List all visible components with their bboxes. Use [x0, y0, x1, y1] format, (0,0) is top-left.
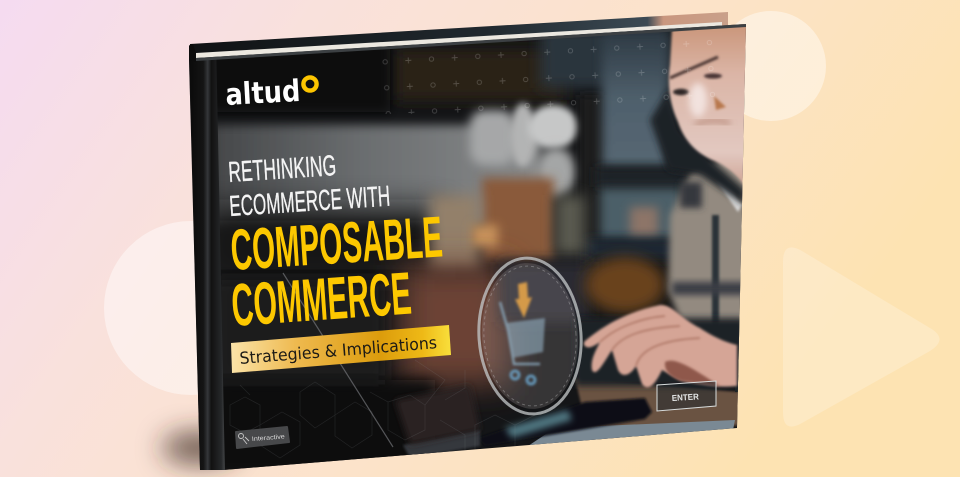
dark lower left [205, 380, 435, 475]
neck shadow [650, 90, 745, 205]
laptop keyboard [395, 385, 480, 445]
book shadow [162, 431, 238, 465]
cover photo [180, 10, 760, 477]
enter button: ENTER [672, 391, 699, 403]
face [669, 22, 750, 195]
heading: composable commerce: COMMERCE [229, 260, 413, 339]
decorative circle: left [104, 221, 278, 395]
bokeh highlights [470, 110, 515, 165]
enter button [657, 381, 716, 411]
subtitle ribbon: Strategies & Implications [239, 333, 438, 368]
heading: composable commerce [229, 204, 444, 339]
decorative play triangle [783, 247, 940, 427]
cover top edge [196, 24, 746, 61]
hologram ring [474, 255, 586, 417]
interactive badge [236, 427, 289, 448]
back cover corner [189, 44, 196, 62]
warm blur patches [482, 178, 554, 260]
dark column beside bokeh [572, 100, 598, 193]
logo: altudo: altud [224, 74, 301, 113]
heading: rethinking ecommerce with: RETHINKING [227, 150, 337, 189]
eyes and brow [670, 57, 730, 124]
grey blurred band [212, 125, 542, 225]
page block [196, 22, 722, 58]
phone [478, 398, 652, 446]
blue column [602, 32, 668, 167]
heading: rethinking ecommerce with [227, 150, 391, 223]
table [575, 378, 740, 442]
book [180, 10, 760, 477]
interactive badge: Interactive [252, 433, 285, 443]
laptop lid edge [283, 273, 393, 447]
heading: composable commerce: COMPOSABLE [229, 204, 444, 283]
front cover [180, 10, 760, 477]
cart icon [500, 302, 545, 384]
spine [189, 40, 225, 475]
hand [584, 305, 737, 387]
heading: rethinking ecommerce with: ECOMMERCE WITH [228, 181, 391, 223]
dot and plus pattern [382, 40, 715, 114]
decorative circle: top right [716, 11, 826, 121]
shirt [668, 150, 750, 345]
blurred top wall [395, 50, 565, 100]
download arrow [515, 282, 532, 318]
icon: tap hand [238, 434, 249, 444]
back cover [190, 12, 728, 70]
hex line pattern [230, 360, 535, 462]
